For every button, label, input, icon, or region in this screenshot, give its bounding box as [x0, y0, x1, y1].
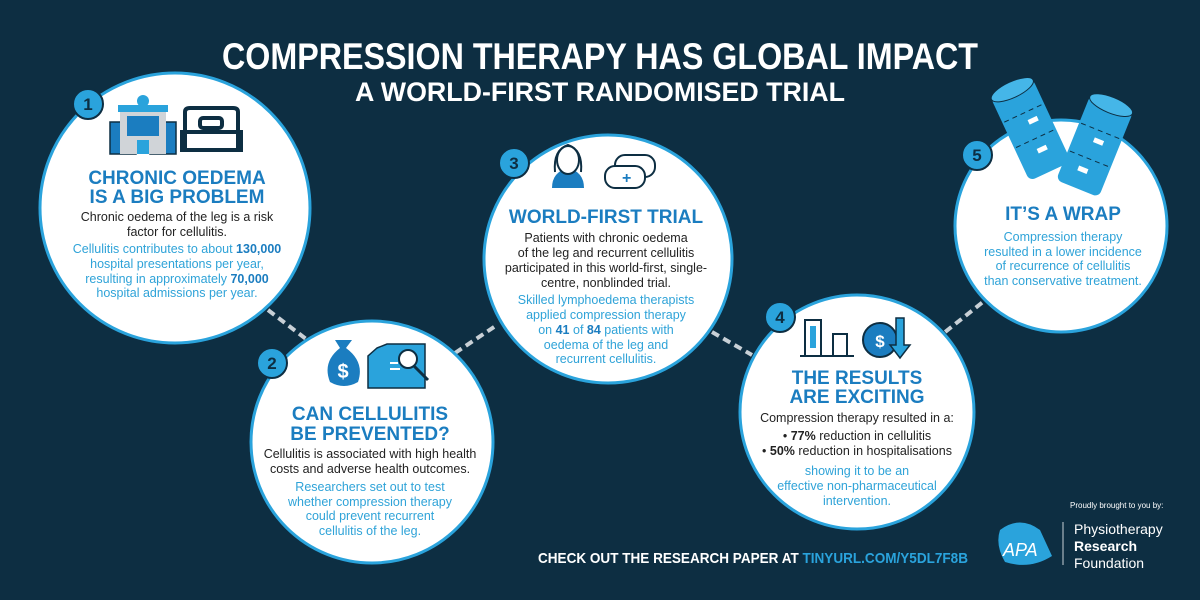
badge 2 [257, 348, 287, 378]
panel 1: chronic oedema [40, 73, 310, 343]
panel 3: world-first trial [484, 135, 732, 383]
icon: bandage rolls [988, 73, 1135, 197]
panel 5: it's a wrap: resulted in a lower incidence [984, 245, 1142, 259]
icon: buildings [800, 320, 854, 356]
logo: physiotherapy research foundation: Foundation [1074, 555, 1144, 571]
panel 4: results: • 77% reduction in cellulitis [783, 429, 931, 443]
icon: hospital [110, 95, 176, 154]
panel 3: world-first trial: oedema of the leg and [544, 338, 668, 352]
text: Compression therapy [1004, 230, 1123, 244]
panel 1: chronic oedema: IS A BIG PROBLEM [90, 187, 264, 208]
panel 3: world-first trial: centre, nonblinded trial. [541, 276, 671, 290]
panel 2: can cellulitis be prevented: could prevent recurrent [306, 509, 435, 523]
heading: CHRONIC OEDEMA [88, 168, 266, 189]
heading: WORLD-FIRST TRIAL [509, 207, 703, 228]
panel 5: it's a wrap: than conservative treatment. [984, 274, 1142, 288]
heading: IT’S A WRAP [1005, 204, 1121, 225]
panel 4: results: ARE EXCITING [789, 387, 925, 408]
badge 3: 3 [509, 154, 519, 173]
logo: physiotherapy research foundation: Research [1074, 538, 1137, 554]
panel 2: can cellulitis be prevented: Researchers set out to test [295, 480, 445, 494]
text: Chronic oedema of the leg is a risk [81, 210, 274, 224]
icon: money bag [328, 340, 360, 386]
panel 1: chronic oedema: factor for cellulitis. [127, 225, 227, 239]
footer link: CHECK OUT THE RESEARCH PAPER AT TINYURL.COM/Y5DL7F8B [538, 550, 968, 567]
panel 3: world-first trial: participated in this world-first, single- [505, 261, 707, 275]
logo: physiotherapy research foundation: Physiotherapy [1074, 521, 1163, 537]
panel 4: results: effective non-pharmaceutical [777, 479, 937, 493]
badge 4 [765, 302, 795, 332]
text: Patients with chronic oedema [524, 231, 688, 245]
logo: physiotherapy research foundation: Proudly brought to you by: [1070, 501, 1163, 510]
panel 4: results: intervention. [823, 494, 891, 508]
panel 2: can cellulitis be prevented: costs and adverse health outcomes. [270, 462, 470, 476]
panel 2: can cellulitis be prevented: cellulitis of the leg. [319, 524, 421, 538]
icon: coin with down arrow: $ [875, 332, 885, 351]
badge 1 [73, 89, 103, 119]
title: A WORLD-FIRST RANDOMISED TRIAL [355, 77, 845, 107]
text: Cellulitis is associated with high health [264, 447, 476, 461]
panel 2: can cellulitis be prevented [251, 321, 493, 563]
connectors [268, 298, 988, 355]
panel 4: results: showing it to be an [805, 464, 909, 478]
panel 1: chronic oedema: hospital admissions per year. [96, 286, 258, 300]
text: Compression therapy resulted in a: [760, 411, 954, 425]
badge 5: 5 [972, 146, 982, 165]
heading: THE RESULTS [792, 368, 922, 389]
icon: bed [182, 108, 241, 152]
panel 5: it's a wrap: of recurrence of cellulitis [996, 259, 1130, 273]
panel 3: world-first trial: applied compression therapy [526, 308, 687, 322]
icon: document with magnifier [368, 344, 428, 388]
badge 4: 4 [775, 308, 785, 327]
panel 3: world-first trial: recurrent cellulitis. [556, 352, 656, 366]
icon: money bag: $ [337, 361, 349, 383]
panel 5: it's a wrap [955, 73, 1167, 332]
panel 1: chronic oedema: resulting in approximately 70,000 [85, 272, 269, 286]
icon: bandages: + [622, 170, 631, 187]
logo: physiotherapy research foundation [998, 501, 1163, 571]
panel 2: can cellulitis be prevented: whether compression therapy [287, 495, 453, 509]
panel 3: world-first trial: Skilled lymphoedema therapists [518, 293, 694, 307]
title [222, 36, 978, 107]
panel 3: world-first trial: of the leg and recurrent cellulitis [518, 246, 694, 260]
heading: CAN CELLULITIS [292, 404, 448, 425]
panel 1: chronic oedema: hospital presentations per year, [90, 257, 264, 271]
badge 5 [962, 140, 992, 170]
icon: bandages [605, 155, 655, 188]
icon: clinician [552, 145, 584, 188]
panel 2: can cellulitis be prevented: BE PREVENTED? [290, 424, 450, 445]
panel 4: results [740, 295, 974, 529]
badge 1: 1 [83, 95, 93, 114]
panel 3: world-first trial: on 41 of 84 patients with [538, 323, 674, 337]
icon: coin with down arrow [863, 318, 910, 358]
badge 3 [499, 148, 529, 178]
badge 2: 2 [267, 354, 277, 373]
logo: physiotherapy research foundation: APA [1002, 540, 1038, 560]
title: COMPRESSION THERAPY HAS GLOBAL IMPACT [222, 36, 978, 77]
panel 4: results: • 50% reduction in hospitalisations [762, 444, 952, 458]
panel 1: chronic oedema: Cellulitis contributes to about 130,000 [73, 242, 281, 256]
